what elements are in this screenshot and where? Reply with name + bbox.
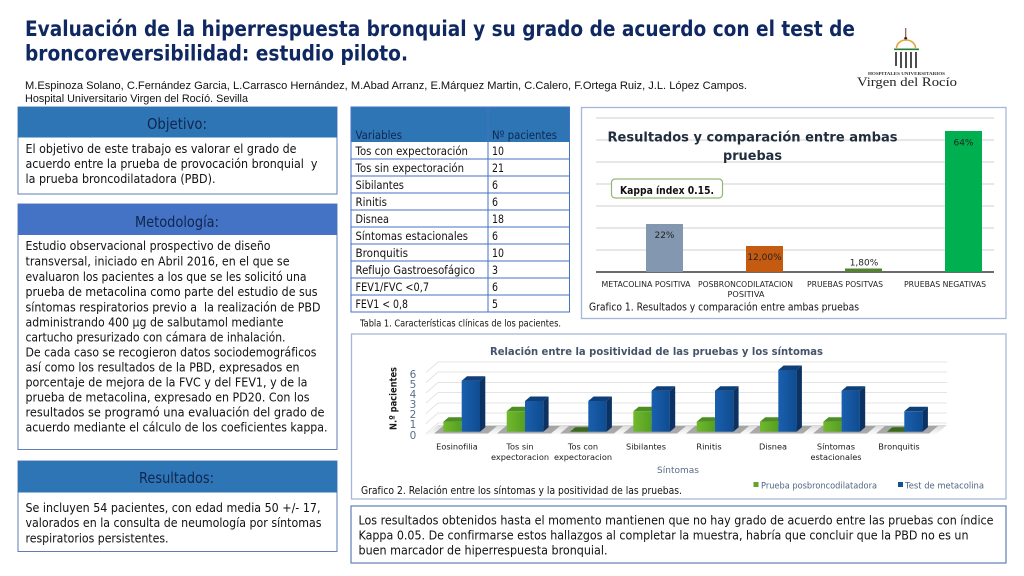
resultados heading [18,461,337,492]
metodologia text: prueba de metacolina, expresado en PD20. Con los [26,391,310,405]
metodologia text: De cada caso se recogieron datos sociodemográficos [26,346,316,360]
group: rinitis [686,386,749,434]
table caption: Tabla 1. Características clínicas de los pacientes. [359,318,561,330]
y axis ticks: 0 [410,430,416,442]
category labels [602,280,986,299]
category labels [436,442,920,462]
bar: pruebas negativas [945,131,982,272]
resultados text: Se incluyen 54 pacientes, con edad media 50 +/- 17, [26,501,320,515]
panel: resultados [18,461,337,552]
group: sibilantes [623,386,686,434]
metodologia text: resultados se programó una evaluación del grado de [26,406,324,420]
category labels: METACOLINA POSITIVA [602,280,691,289]
category labels: Bronquitis [878,442,920,452]
bar: pruebas positivas [845,258,882,272]
table: clinical characteristics: FEV1/FVC <0,7 [356,280,429,294]
table: clinical characteristics: 10 [492,144,504,158]
legend: Prueba posbroncodilatadora [761,480,877,492]
bar: metacolina positiva [646,224,683,272]
authors and affiliation: M.Espinoza Solano, C.Fernández Garcia, L.Carrasco Hernández, M.Abad Arranz, E.Márquez Martin, C.Calero, F.Ortega Ruiz, J.L. López Campos. [25,80,747,92]
metodologia text: cartucho presurizado con cámara de inhalación. [26,330,286,344]
metodologia text: transversal, iniciado en Abril 2016, en el que se [26,254,290,268]
metodologia heading: Metodología: [135,213,219,231]
bar: posbroncodilatacion positiva [746,246,783,272]
title [25,17,855,66]
category labels: Síntomas [817,442,855,452]
category labels: Disnea [759,442,787,452]
y axis ticks: 3 [410,399,416,411]
panel: grafico 2 [352,334,1006,499]
y axis ticks [410,369,417,442]
y axis title: N.º pacientes [388,367,400,430]
x axis title: Síntomas [657,466,699,476]
chart title [608,130,898,164]
chart title: Resultados y comparación entre ambas [608,130,898,146]
group: eosinofilia [434,376,497,434]
panel: metodologia [18,204,337,450]
y axis ticks: 1 [410,419,416,431]
table: clinical characteristics: 6 [492,178,498,192]
table: clinical characteristics: Variables [356,128,402,142]
table: clinical characteristics: 10 [492,246,504,260]
table: clinical characteristics: Tos con expectoración [355,144,468,158]
objetivo heading: Objetivo: [147,115,207,133]
metodologia text: porcentaje de mejora de la FVC y del FEV1, y de la [26,376,308,390]
title: broncoreversibilidad: estudio piloto. [25,42,408,66]
category labels: POSBRONCODILATACION [698,280,793,289]
category labels: expectoracion [491,452,549,462]
objetivo text: El objetivo de este trabajo es valorar el grado de [26,142,296,156]
table: clinical characteristics: 5 [492,297,498,311]
metodologia text: evaluaron los pacientes a los que se les solicitó una [26,270,306,284]
category labels: PRUEBAS NEGATIVAS [904,280,986,289]
icon: hospital logo: Virgen del Rocío [857,75,957,89]
table: clinical characteristics: Tos sin expectoración [355,161,464,175]
authors and affiliation [25,80,747,105]
table: clinical characteristics: Bronquitis [356,246,408,260]
y axis ticks: 4 [410,389,417,401]
category labels: Tos sin [505,442,534,452]
table: clinical characteristics: Disnea [356,212,389,226]
resultados heading: Resultados: [139,469,214,487]
icon: hospital logo: HOSPITALES UNIVERSITARIOS [868,71,945,76]
table: clinical characteristics: 6 [492,195,498,209]
table: clinical characteristics: 21 [492,161,504,175]
authors and affiliation: Hospital Universitario Virgen del Rocíó. Sevilla [25,93,249,105]
metodologia text: síntomas respiratorios previo a la realización de PBD [26,301,320,315]
category labels: PRUEBAS POSITVAS [807,280,883,289]
metodologia text: acuerdo mediante el cálculo de los coeficientes kappa. [26,421,328,435]
group: tos sin expectoracion [497,396,560,434]
metodologia text: Estudio observacional prospectivo de diseño [26,239,270,253]
category labels: Sibilantes [626,442,666,452]
table: clinical characteristics: 6 [492,280,498,294]
callout: kappa index: Kappa índex 0.15. [620,185,714,197]
table: clinical characteristics: Nº pacientes [492,128,557,142]
table: clinical characteristics: Rinitis [356,195,387,209]
resultados text [26,501,322,545]
table: clinical characteristics [351,107,570,312]
y axis ticks: 5 [410,379,416,391]
table: clinical characteristics: FEV1 < 0,8 [356,297,408,311]
y axis ticks: 6 [410,369,417,381]
table: clinical characteristics: Sibilantes [356,178,404,192]
objetivo text: acuerdo entre la prueba de provocación bronquial y [26,157,318,171]
bar: pruebas negativas: 64% [953,138,974,148]
metodologia text: prueba de metacolina como parte del estudio de sus [26,285,318,299]
category labels: Tos con [567,442,598,452]
legend [754,480,984,492]
table: clinical characteristics: 6 [492,229,498,243]
objetivo heading [18,107,337,138]
3D bar chart: symptoms [434,366,938,434]
table: clinical characteristics: Síntomas estacionales [356,229,468,243]
table: clinical characteristics: Reflujo Gastroesofágico [356,263,475,277]
objetivo text: la prueba broncodilatadora (PBD). [26,172,216,186]
category labels: estacionales [810,452,862,462]
resultados text: respiratorios persistentes. [26,531,168,545]
category labels: expectoracion [554,452,612,462]
group: disnea [749,366,812,434]
group: bronquitis [876,407,938,434]
panel: conclusion: buen marcador de hiperrespuesta bronquial. [358,544,608,558]
panel: grafico 1 [582,108,1006,318]
table: clinical characteristics: 18 [492,212,504,226]
y axis ticks: 2 [410,409,416,421]
bar: pruebas positivas: 1,80% [850,258,879,268]
table: clinical characteristics: 3 [492,263,498,277]
chart 2 caption: Grafico 2. Relación entre los síntomas y la positividad de las pruebas. [361,485,682,497]
metodologia text: así como los resultados de la PBD, expresados en [26,361,300,375]
category labels: Eosinofilia [436,442,478,452]
chart floor [426,425,947,435]
category labels: Rinitis [696,442,722,452]
metodologia heading [18,204,337,235]
bar: posbroncodilatacion positiva: 12,00% [747,253,782,263]
panel: conclusion [351,506,1006,563]
icon: hospital logo [857,28,957,89]
chart 1 caption: Grafico 1. Resultados y comparación entre ambas pruebas [589,302,859,314]
group: sintomas estacionales [813,386,876,434]
panel: conclusion: Kappa 0.05. De confirmarse estos hallazgos al completar la muestra, habría que concluir que la PBD no es un [358,528,968,542]
panel: objetivo [18,107,337,194]
chart title: pruebas [723,148,782,164]
group: tos con expectoracion [560,396,623,434]
objetivo text [26,142,318,186]
chart 2 title: Relación entre la positividad de las pruebas y los síntomas [490,345,823,358]
category labels: POSITIVA [728,290,765,299]
metodologia text [26,239,328,435]
metodologia text: administrando 400 µg de salbutamol mediante [26,316,284,330]
title: Evaluación de la hiperrespuesta bronquial y su grado de acuerdo con el test de [25,17,855,41]
bar chart: test results [602,131,986,299]
callout: kappa index [612,179,722,198]
resultados text: valorados en la consulta de neumología por síntomas [26,516,322,530]
legend: Test de metacolina [904,480,984,492]
bar: metacolina positiva: 22% [654,231,675,241]
